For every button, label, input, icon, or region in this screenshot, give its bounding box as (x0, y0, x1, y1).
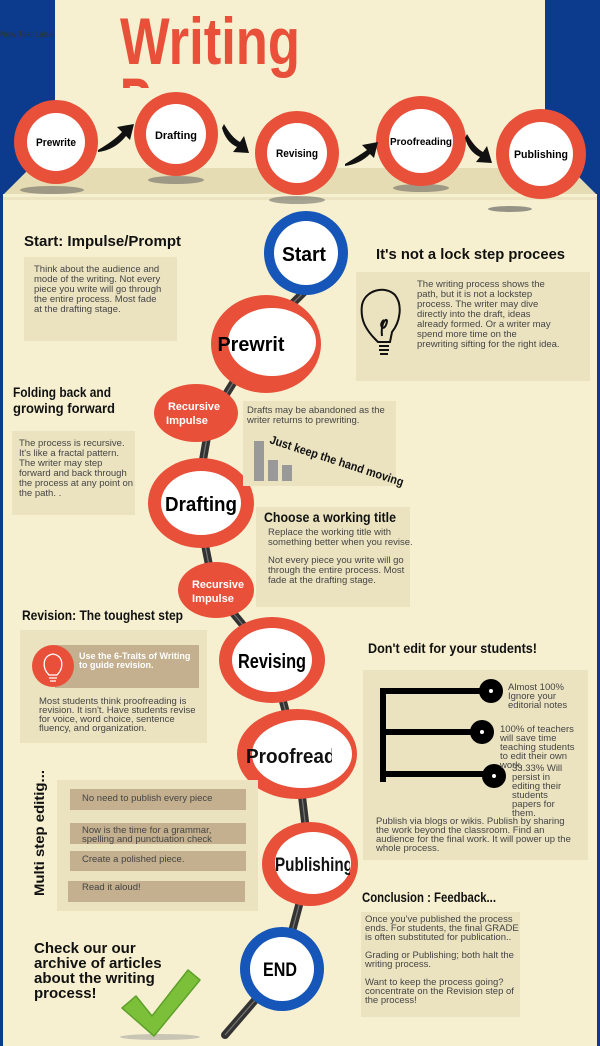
panel: multi step: Read it aloud! (82, 882, 141, 893)
panel: lock step (356, 246, 590, 381)
panel: don't edit (363, 640, 588, 860)
panel: revision: Use the 6-Traits of Writing (79, 651, 190, 661)
panel: multi step: spelling and punctuation check (82, 834, 212, 845)
panel: multi step: Multi step editig... (31, 770, 47, 896)
node: recursive impulse 1: Recursive (168, 401, 220, 413)
node: publishing (262, 822, 358, 906)
panel: don't edit: work. (499, 760, 523, 771)
panel: don't edit: audience for the final work. It will power up the (376, 834, 571, 845)
panel: revision: for voice, word choice, sentence (39, 714, 175, 725)
panel: lock step: The writing process shows the (417, 279, 545, 290)
panel: don't edit: the work beyond the classroom. Find an (376, 825, 544, 836)
text: archive: Check our our (34, 940, 136, 957)
panel: lock step: process. The writer may dive (417, 299, 538, 310)
path line (196, 290, 310, 1035)
node: prewrit (211, 295, 321, 393)
title: Process (120, 64, 300, 138)
panel: folding back: The writer may step (19, 458, 102, 469)
arrows (98, 124, 492, 166)
node: revising: Revising (238, 651, 306, 673)
label: new text: New Text Label (0, 30, 55, 39)
node: recursive impulse 2: Impulse (192, 593, 234, 605)
text: archive: about the writing (34, 970, 155, 987)
panel: drafts abandoned (243, 401, 406, 489)
panel: start impulse: piece you write will go through (34, 284, 161, 295)
header panel (55, 0, 545, 200)
panel: don't edit: Almost 100% (508, 682, 565, 693)
panel: don't edit: whole process. (375, 843, 439, 854)
title (120, 16, 296, 88)
node: proofread: Proofreading (246, 746, 364, 768)
panel: working title: Replace the working title with (268, 527, 391, 538)
panel: working title: something better when you revise. (268, 537, 413, 548)
panel: conclusion: writing process. (364, 959, 431, 970)
top process circles: Revising (276, 148, 318, 160)
panel: multi step: Create a polished piece. (82, 854, 184, 865)
node: revising (219, 617, 325, 703)
panel: start impulse: Start: Impulse/Prompt (24, 233, 181, 250)
icon: checkmark (120, 970, 200, 1040)
node: start (264, 211, 348, 295)
panel: multi step (31, 770, 258, 911)
panel: start impulse (24, 233, 181, 341)
panel: conclusion: concentrate on the Revision step of (365, 986, 514, 997)
panel: working title (256, 507, 413, 607)
panel: start impulse: Think about the audience and (34, 264, 159, 275)
panel: start impulse: mode of the writing. Not every (34, 274, 160, 285)
title: Writing (120, 4, 300, 78)
panel: don't edit: Don't edit for your students! (368, 640, 537, 656)
panel: lock step: path, but it is not a lockstep (417, 289, 532, 300)
panel: working title: through the entire process. Most (268, 565, 405, 576)
panel: revision: Most students think proofreading is (39, 696, 187, 707)
top process circles: Prewrite (36, 137, 76, 149)
panel: lock step: already formed. Or a writer may (417, 319, 551, 330)
panel: folding back: forward and back through (19, 468, 127, 479)
icon: lightbulb (362, 290, 400, 354)
panel: conclusion (361, 889, 520, 1017)
top process circles: Drafting (155, 130, 197, 142)
panel: drafts abandoned: Drafts may be abandoned as the (247, 405, 385, 416)
panel: folding back (12, 384, 135, 515)
panel: don't edit: them. (512, 808, 536, 819)
node: proofread (237, 709, 364, 799)
panel: working title: Not every piece you write will go (268, 555, 404, 566)
text: archive (34, 940, 162, 1002)
node: recursive impulse 2: Recursive (192, 579, 244, 591)
node: drafting (148, 458, 254, 548)
node: publishing: Publishing (275, 855, 353, 876)
panel: working title: Choose a working title (264, 510, 396, 525)
panel: start impulse: the entire process. Most fade (34, 294, 157, 305)
panel: don't edit: 100% of teachers (500, 724, 574, 735)
panel: don't edit: 33.33% Will (512, 763, 562, 774)
panel: conclusion: is often substituted for publication.. (365, 932, 511, 943)
panel: lock step: spend more time on the (417, 329, 517, 340)
panel: conclusion: ends. For students, the final GRADE (365, 923, 519, 934)
panel: revision: fluency, and organization. (39, 723, 147, 734)
node: recursive impulse 1: Impulse (166, 415, 208, 427)
panel: multi step: No need to publish every piece (82, 793, 212, 804)
panel: revision: to guide revision. (79, 660, 154, 670)
top process circles: Publishing (514, 149, 568, 161)
panel: drafts abandoned: Just keep the hand moving (268, 433, 406, 489)
panel: conclusion: the process! (365, 995, 417, 1006)
panel: lock step: directly into the draft, ideas (417, 309, 531, 320)
node: recursive impulse 1 (154, 384, 238, 442)
panel: revision: Revision: The toughest step (22, 607, 183, 623)
panel: don't edit: editorial notes (508, 700, 567, 711)
shelf (4, 168, 596, 194)
text: archive: archive of articles (34, 955, 162, 972)
panel: start impulse: at the drafting stage. (34, 304, 121, 315)
panel: conclusion: Grading or Publishing; both halt the (365, 950, 514, 961)
panel: conclusion: Once you've published the process (365, 914, 513, 925)
panel: conclusion: Conclusion : Feedback... (362, 889, 496, 905)
panel: don't edit: teaching students (500, 742, 575, 753)
panel: revision (20, 607, 207, 743)
panel: lock step: It's not a lock step procees (376, 246, 565, 263)
panel: don't edit: Publish via blogs or wikis. Publish by sharing (376, 816, 565, 827)
top process circles (14, 92, 586, 212)
panel: working title: fade at the drafting stage. (268, 575, 376, 586)
panel: folding back: It's like a fractal pattern. (19, 448, 119, 459)
node: recursive impulse 2 (178, 562, 254, 618)
text: archive: process! (34, 985, 97, 1002)
node: prewrit: Prewrit (218, 334, 285, 356)
panel: don't edit: Ignore your (508, 691, 556, 702)
panel: don't edit: editing their (512, 781, 561, 792)
panel: revision: revision. It isn't. Have students revise (39, 705, 196, 716)
panel: don't edit: papers for (512, 799, 555, 810)
top process circles: Proofreading (390, 136, 452, 148)
panel: don't edit: will save time (499, 733, 556, 744)
panel: drafts abandoned: writer returns to prewriting. (246, 415, 359, 426)
panel: folding back: Folding back and (13, 384, 111, 400)
node: drafting: Drafting (165, 494, 237, 516)
panel: don't edit: to edit their own (500, 751, 567, 762)
panel: conclusion: Want to keep the process going? (365, 977, 504, 988)
panel: folding back: The process is recursive. (19, 438, 125, 449)
panel: folding back: the process at any point on (19, 478, 133, 489)
node: end (240, 927, 324, 1011)
node: end: END (263, 960, 297, 981)
panel: don't edit: persist in (512, 772, 550, 783)
panel: multi step: Now is the time for a grammar, (82, 825, 211, 836)
node: start: Start (282, 244, 326, 266)
panel: folding back: the path. . (19, 488, 61, 499)
panel: lock step: prewriting sifting for the right idea. (417, 339, 560, 350)
panel: folding back: growing forward (13, 400, 115, 416)
panel: don't edit: students (512, 790, 548, 801)
